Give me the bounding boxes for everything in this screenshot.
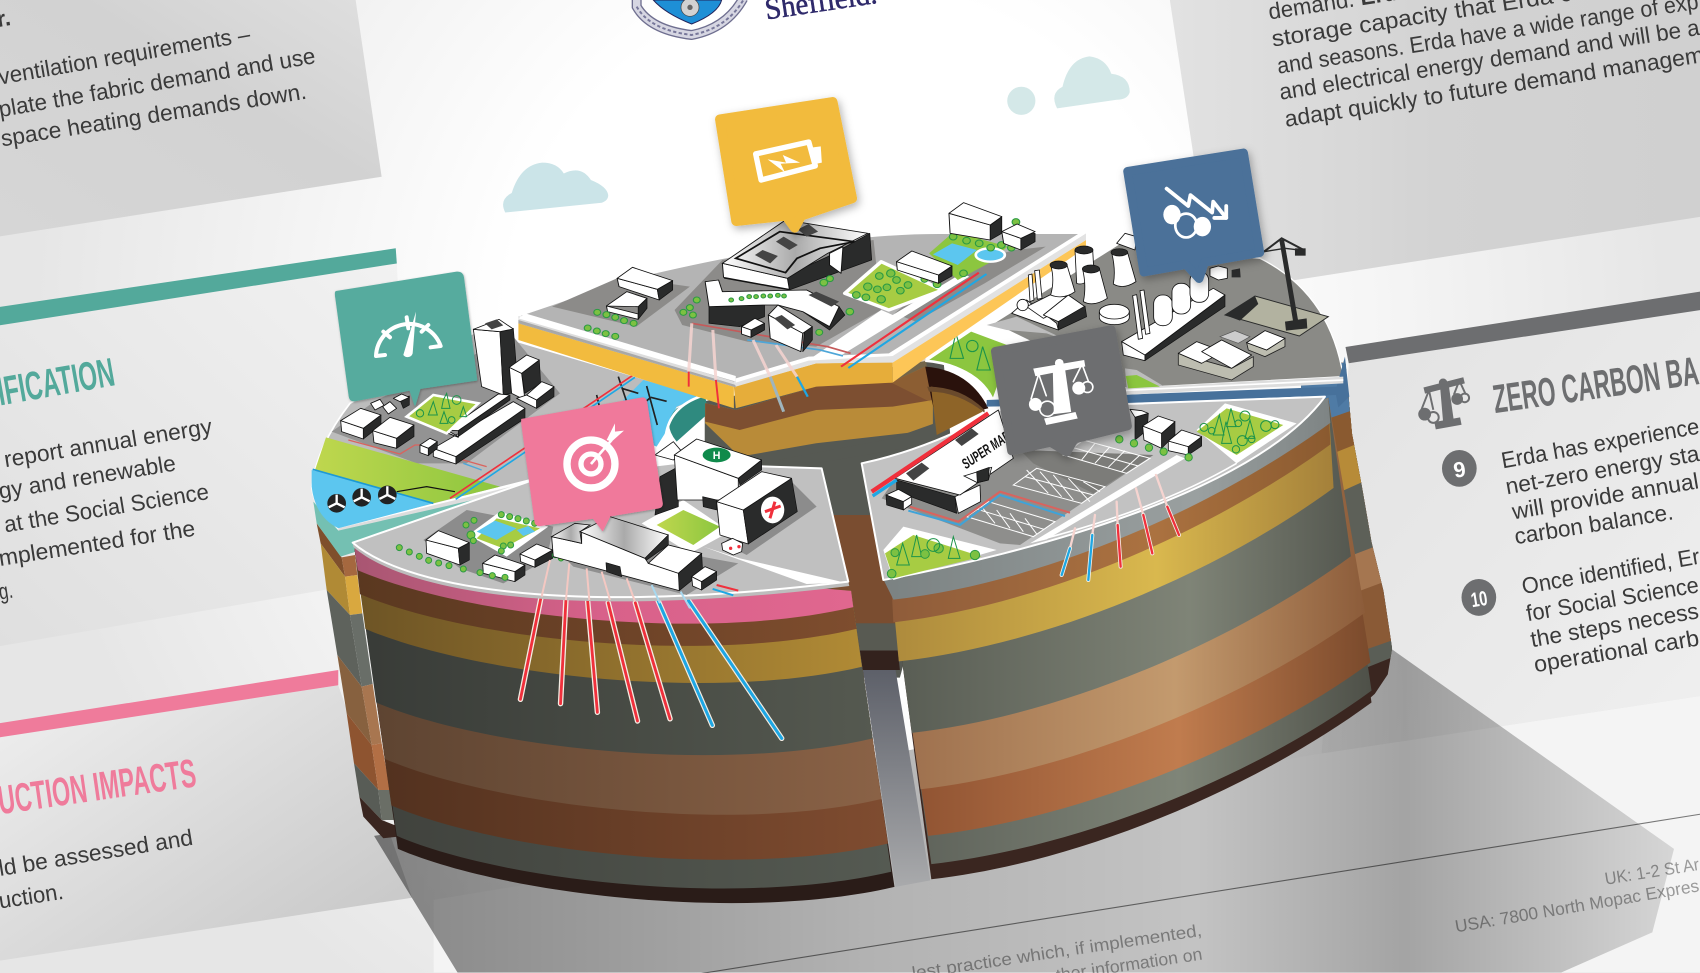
- number badge 9: [1442, 450, 1477, 487]
- panel: grey zero carbon balance section: carbon balance.: [1512, 498, 1675, 549]
- inner strata faces: [705, 357, 935, 463]
- footer rule and text: USA: 7800 North Mopac Expres: [1453, 875, 1700, 936]
- panel: top right grey text block: adapt quickly to future demand managem: [1283, 41, 1700, 132]
- teal wedge edge: [338, 482, 532, 537]
- icons in main coordinates: [720, 102, 1260, 452]
- wedge: grey top surface: [862, 397, 1325, 580]
- white road: [809, 273, 969, 360]
- panel: top left grey text block: space heating demands down.: [0, 78, 308, 151]
- roadside trees: [1116, 436, 1192, 461]
- factory: [1012, 270, 1087, 330]
- main campus building: [722, 220, 872, 290]
- small buildings: [426, 531, 553, 582]
- panel: grey zero carbon balance section: will provide annual: [1509, 467, 1700, 524]
- X-shaped building: [705, 280, 845, 352]
- utility lines: [348, 375, 635, 499]
- wedge: pink (targets) strata: [355, 549, 894, 903]
- panel: grey zero carbon balance section: net-zero energy sta: [1503, 440, 1700, 499]
- car park surface: [882, 450, 1153, 545]
- rim: [353, 543, 849, 601]
- number badge 9: 9: [1452, 456, 1467, 483]
- ground surface: [518, 233, 1086, 383]
- tank: [1099, 304, 1129, 325]
- wedge: yellow (storage): [518, 203, 1086, 463]
- wedge: grey (zero carbon balance) strata: [884, 398, 1372, 879]
- helipad: [703, 448, 731, 462]
- small office blocks: [606, 203, 1035, 319]
- ambulance: [722, 538, 743, 555]
- hospital: [655, 439, 797, 544]
- number badge 10: 10: [1469, 587, 1489, 612]
- park front: [883, 527, 997, 580]
- trees: [584, 276, 854, 339]
- central well: [925, 367, 988, 435]
- water with wind turbines: [312, 469, 455, 528]
- pipe routes: [908, 492, 1070, 525]
- rear right strata strip: [1301, 362, 1392, 698]
- low buildings: [1178, 331, 1285, 380]
- pad: [332, 337, 560, 463]
- supermarket: [872, 410, 1014, 513]
- geothermal pipes: [520, 597, 782, 738]
- buildings: [341, 319, 554, 464]
- panel: teal energy verification section: gy and renewable: [0, 450, 177, 504]
- logo: council crest: [637, 0, 743, 35]
- pit: [1225, 296, 1328, 336]
- surface: [353, 463, 848, 597]
- wedge: pink top surface: [353, 439, 849, 608]
- footer rule and text: [694, 814, 1700, 973]
- supermarket: SUPER MAR: [959, 428, 1014, 473]
- number badge 10: [1462, 579, 1496, 616]
- panel: top right grey text block: [1170, 0, 1700, 293]
- lake and rear turbines: [597, 377, 708, 447]
- panel: grey zero carbon balance section: [434, 292, 1700, 973]
- icon: balance scale: [1419, 378, 1469, 428]
- gap between wedges: [863, 670, 930, 887]
- icon: blue demand marker: [1128, 153, 1260, 279]
- parking bays: [967, 440, 1150, 537]
- red cross badge: [761, 497, 784, 523]
- rear left strata strip: [317, 523, 398, 838]
- panel: top left grey text block: plate the fabric demand and use: [0, 42, 317, 122]
- wedge: blue (power generation): [987, 233, 1349, 407]
- surface pipe traces: [542, 560, 738, 608]
- platform with silos: [1122, 272, 1225, 361]
- panel: top left grey text block: ventilation requirements –: [0, 20, 252, 89]
- cloud right: [1007, 56, 1130, 115]
- panel: top right grey text block: and electrical energy demand and will be a: [1277, 14, 1700, 105]
- panel: grey zero carbon balance section: operational carb: [1532, 624, 1700, 677]
- icon: grey balance marker: [995, 330, 1128, 452]
- trees: [396, 512, 564, 580]
- cast shadow on document: [374, 649, 1674, 973]
- ground surface: [312, 333, 702, 528]
- panel: teal energy verification section: mplemented for the: [0, 515, 197, 571]
- panel: pink construction impacts section: ld be assessed and: [0, 824, 195, 881]
- helipad: H: [713, 450, 720, 462]
- surface: [993, 243, 1343, 388]
- wedge: teal (energy verification) top surface: [312, 319, 708, 557]
- surface edge and blue rim: [987, 357, 1349, 407]
- green area beside well: [925, 332, 1011, 407]
- central column between wedges: [705, 358, 954, 678]
- lawn: [642, 500, 730, 553]
- park: [845, 262, 942, 310]
- gold wedge edge: [518, 233, 1086, 408]
- pads: [423, 480, 817, 595]
- blocks near icon: [1130, 409, 1202, 455]
- green and road corner: [987, 317, 1163, 388]
- park right: [1197, 403, 1297, 463]
- main hospital wing: [552, 517, 717, 591]
- panel: teal energy verification section: at the Social Science: [2, 478, 211, 537]
- icon: pink target marker: [522, 398, 662, 531]
- surface: [862, 397, 1325, 580]
- pool garden: [929, 219, 1020, 280]
- cooling towers: [1050, 233, 1137, 304]
- panel: teal energy verification section: report annual energy: [2, 413, 214, 472]
- crane: [1210, 238, 1307, 331]
- panel: pink construction impacts section: [0, 670, 412, 961]
- panel: grey zero carbon balance section: the steps necess: [1528, 597, 1700, 652]
- green field: [315, 437, 500, 503]
- panel: pink construction impacts section: UCTION IMPACTS: [0, 751, 199, 823]
- geothermal pipes: [1062, 475, 1179, 580]
- icon: yellow battery marker: [720, 102, 852, 228]
- park with trees: [407, 393, 478, 433]
- white access road: [703, 547, 845, 584]
- cloud left: [503, 163, 608, 213]
- panel: top left grey text block: [0, 0, 382, 236]
- panel: teal energy verification section: [0, 248, 412, 646]
- pads: [552, 240, 1046, 347]
- access road: [1030, 455, 1185, 543]
- pipes: [689, 273, 986, 412]
- layered ground cylinder: [705, 358, 1409, 887]
- pool garden: [468, 512, 548, 557]
- icon: teal gauge marker: [335, 272, 477, 405]
